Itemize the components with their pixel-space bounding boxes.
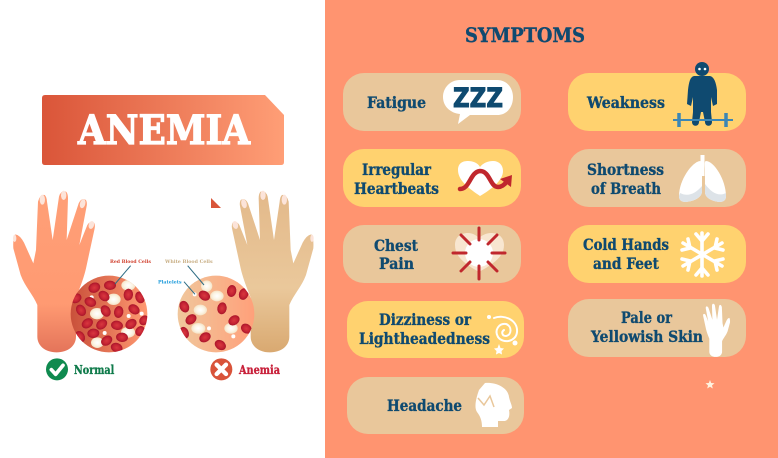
label: red blood cells: Red Blood Cells: [110, 259, 151, 265]
panel: pale or yellowish skin: [568, 299, 746, 357]
panel: cold hands and feet: [568, 225, 746, 283]
panel: shortness of breath: [568, 149, 746, 207]
panel: cold hands and feet: and Feet: [593, 254, 660, 273]
icon: person with barbell: [673, 62, 733, 127]
label: white blood cells: White Blood Cells: [164, 259, 213, 265]
panel: headache: [347, 377, 524, 434]
title banner: ANEMIA: [42, 95, 284, 165]
icon: normal hand: [13, 191, 95, 352]
label: platelets: Platelets: [158, 279, 182, 285]
illustration: anemia hand and blood: [158, 191, 314, 380]
legend: anemia: Anemia: [238, 363, 280, 377]
panel: chest pain: Pain: [379, 254, 414, 273]
panel: irregular heartbeats: Irregular: [362, 160, 432, 179]
panel: dizziness: [347, 301, 524, 358]
panel: cold hands and feet: Cold Hands: [583, 235, 669, 254]
panel: weakness: [568, 62, 746, 131]
chart: normal blood circle: [69, 276, 151, 354]
panel: headache: Headache: [387, 396, 462, 415]
icon: head silhouette with crack: [475, 383, 512, 427]
icon: heart with pulse arrow: [458, 161, 512, 196]
panel: irregular heartbeats: [343, 149, 521, 207]
panel: shortness of breath: of Breath: [591, 179, 661, 198]
decorative star: [706, 380, 714, 388]
heading: symptoms: SYMPTOMS: [465, 23, 585, 47]
legend: normal: Normal: [74, 363, 115, 377]
panel: fatigue: Fatigue: [367, 93, 426, 112]
title banner: ANEMIA: ANEMIA: [77, 107, 251, 154]
decorative red triangle: [211, 198, 221, 208]
label: platelets: [158, 279, 195, 294]
legend: normal: [46, 358, 115, 380]
panel: symptoms background: [325, 0, 778, 458]
icon: anemic hand: [232, 191, 314, 352]
icon: sleep speech bubble: ZZZ: [453, 83, 503, 114]
panel: chest pain: [343, 225, 521, 283]
icon: lungs: [679, 155, 726, 202]
panel: dizziness: Lightheadedness: [359, 329, 490, 348]
panel: shortness of breath: Shortness: [587, 160, 664, 179]
icon: dizzy spiral and stars: [487, 315, 518, 354]
icon: white hand: [703, 304, 730, 357]
label: red blood cells: [110, 259, 151, 284]
icon: sleep speech bubble: [443, 80, 513, 124]
panel: irregular heartbeats: Heartbeats: [354, 179, 439, 198]
panel: dizziness: Dizziness or: [379, 310, 472, 329]
icon: snowflake: [682, 233, 723, 276]
panel: weakness: Weakness: [586, 93, 665, 112]
panel: chest pain: Chest: [374, 236, 419, 255]
legend: anemia: [210, 358, 280, 380]
panel: pale or yellowish skin: Yellowish Skin: [590, 327, 703, 346]
panel: fatigue: [343, 73, 521, 131]
chart: anemic blood circle: [178, 276, 254, 352]
illustration: normal hand and blood: [13, 191, 151, 380]
panel: pale or yellowish skin: Pale or: [621, 308, 673, 327]
label: white blood cells: [164, 259, 213, 285]
icon: chest pain burst: [453, 228, 505, 279]
